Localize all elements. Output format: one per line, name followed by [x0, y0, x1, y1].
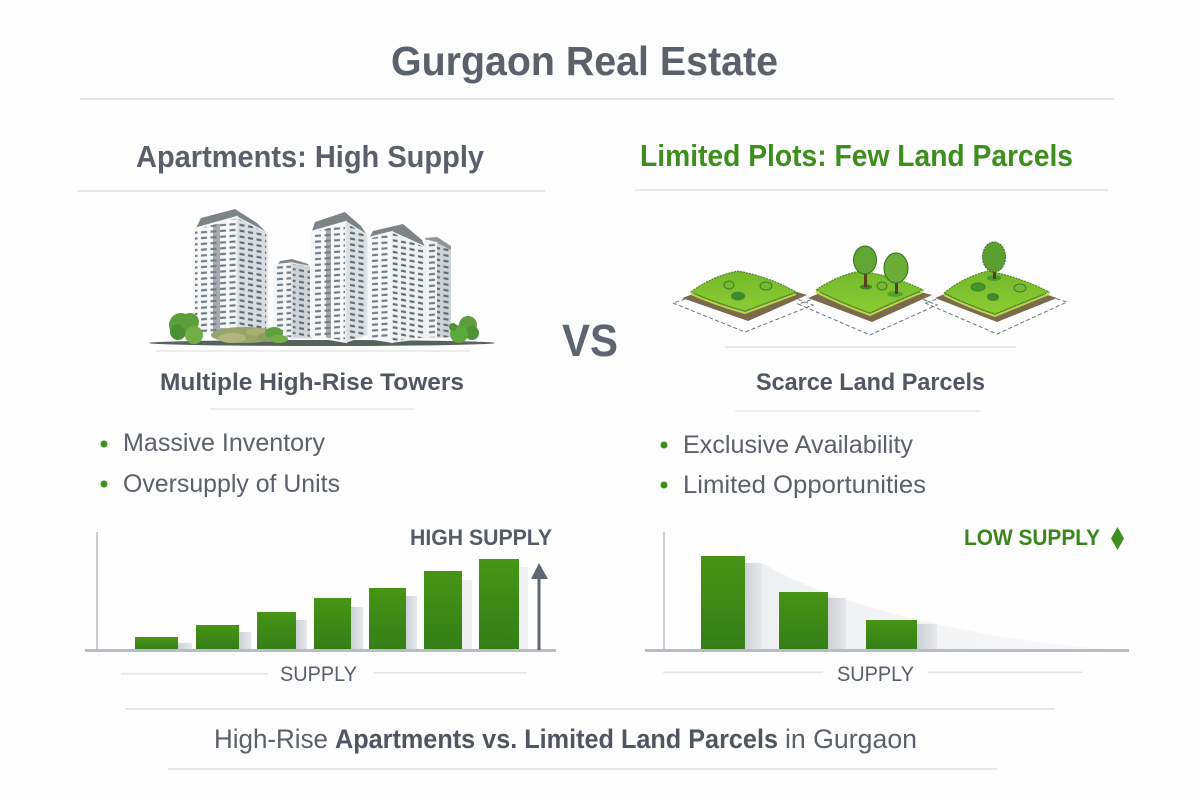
title: Gurgaon Real Estate — [391, 38, 778, 84]
vs label: VS — [562, 315, 618, 366]
tower 3 — [311, 212, 367, 342]
axis label: left supply: SUPPLY — [280, 663, 357, 686]
bar chart: high supply — [85, 525, 556, 652]
plot 2 — [798, 246, 937, 335]
list: apartments points: Massive Inventory — [123, 429, 325, 457]
icon: diamond — [1111, 527, 1124, 550]
list: plots points — [660, 431, 926, 499]
footer caption — [125, 708, 1055, 770]
tower 4 — [368, 224, 425, 342]
shrubs left — [169, 313, 288, 344]
subheading: towers: Multiple High-Rise Towers — [160, 369, 464, 396]
arrow: rising supply — [531, 563, 548, 650]
plot 3 — [925, 242, 1067, 334]
list: apartments points — [100, 429, 340, 498]
shrubs right — [449, 316, 479, 343]
heading: limited plots: Limited Plots: Few Land Parcels — [640, 138, 1073, 173]
list: apartments points: Oversupply of Units — [123, 470, 340, 498]
footer caption: in Gurgaon — [785, 724, 917, 754]
axis label: right supply: SUPPLY — [837, 663, 914, 686]
footer caption: High-Rise — [214, 724, 328, 754]
list: plots points: Exclusive Availability — [683, 431, 913, 459]
plot 1 — [673, 271, 813, 332]
label: high supply: HIGH SUPPLY — [410, 525, 552, 550]
footer caption: Apartments vs. Limited Land Parcels — [335, 724, 778, 754]
subheading: parcels: Scarce Land Parcels — [756, 369, 985, 396]
tower 2 small — [274, 259, 312, 338]
heading: apartments: Apartments: High Supply — [136, 139, 485, 174]
bar chart: low supply — [645, 525, 1129, 652]
icon: high-rise towers — [149, 209, 495, 352]
label: low supply: LOW SUPPLY — [964, 525, 1100, 550]
icon: land parcels — [673, 242, 1067, 348]
tower 1 — [194, 209, 267, 337]
list: plots points: Limited Opportunities — [683, 471, 926, 499]
tower 5 narrow — [425, 237, 451, 338]
